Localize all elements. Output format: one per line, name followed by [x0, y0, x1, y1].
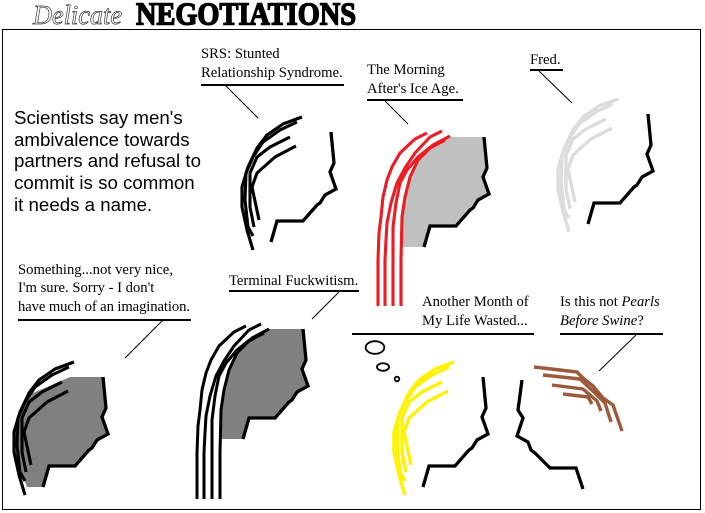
- title: [32, 0, 356, 32]
- figure: black hair man with dark grey face: [14, 362, 108, 495]
- caption: SRS: [201, 46, 344, 118]
- caption: Fred: [530, 52, 572, 103]
- caption: SRS: Relationship Syndrome.: [201, 65, 343, 81]
- caption: Something: have much of an imagination.: [18, 299, 190, 315]
- caption: Something: [18, 262, 191, 358]
- intro text block: Scientists say men's: [14, 107, 183, 128]
- figure: light grey hair man: [558, 99, 653, 232]
- caption: Pearls Before Swine: Is this not Pearls: [560, 294, 660, 310]
- intro text block: ambivalence towards: [14, 129, 190, 150]
- caption: Fred: Fred.: [530, 52, 561, 68]
- caption: Morning After: The Morning: [367, 62, 445, 78]
- caption: Terminal: [229, 273, 359, 319]
- intro text block: it needs a name.: [14, 194, 152, 215]
- figure: long black hair man with dark grey face: [197, 324, 308, 499]
- intro text block: commit is so common: [14, 172, 195, 193]
- caption: Morning After: [367, 62, 463, 124]
- caption: Something: I'm sure. Sorry - I don't: [18, 280, 154, 296]
- caption: Terminal: Terminal Fuckwitism.: [229, 273, 358, 289]
- figure: brown hair man facing left: [517, 367, 622, 489]
- figure: red hair man with grey face: [378, 131, 489, 306]
- title: Delicate: Delicate: [32, 0, 122, 30]
- figure: yellow hair man: [394, 362, 488, 495]
- caption: Something: Something...not very nice,: [18, 262, 173, 278]
- caption: Morning After: After's Ice Age.: [367, 81, 459, 97]
- caption: Another Month: Another Month of: [422, 294, 529, 310]
- intro text block: [14, 107, 201, 215]
- intro text block: partners and refusal to: [14, 150, 201, 171]
- icon: thought bubbles: [366, 341, 399, 381]
- figure: black hair man: [242, 117, 336, 250]
- caption: Pearls Before Swine: [560, 294, 663, 371]
- caption: SRS: SRS: Stunted: [201, 46, 280, 62]
- caption: Pearls Before Swine: Before Swine?: [560, 313, 644, 329]
- caption: Another Month: My Life Wasted...: [422, 313, 528, 329]
- caption: Another Month: [352, 294, 534, 334]
